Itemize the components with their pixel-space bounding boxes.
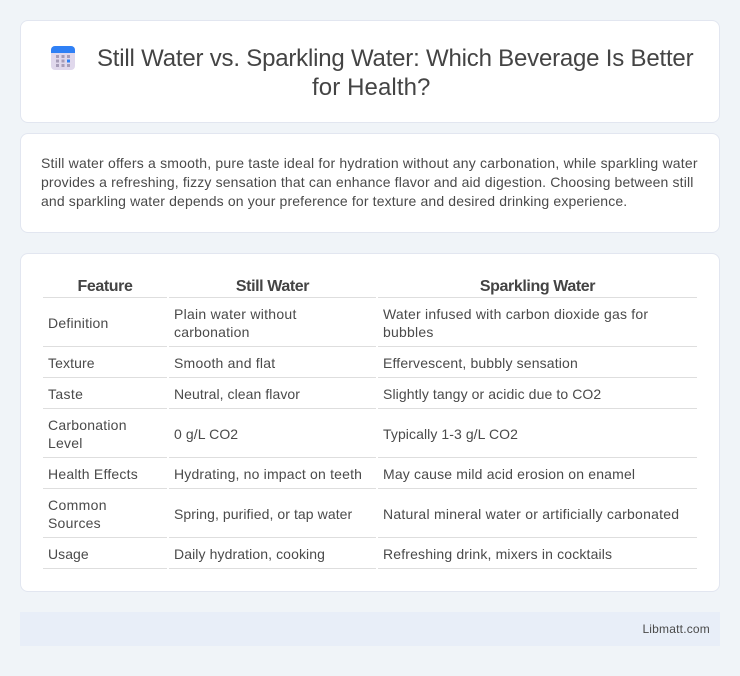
row: Carbonation Level: Level — [48, 435, 83, 451]
row: Usage: Usage — [48, 546, 89, 562]
row: Texture: Texture — [48, 355, 95, 371]
row: Common Sources — [48, 497, 679, 531]
row: Carbonation Level: Carbonation — [48, 417, 127, 433]
row: Usage: Refreshing drink, mixers in cocktails — [383, 546, 612, 562]
row: Common Sources: Common — [48, 497, 107, 513]
row: Definition: carbonation — [174, 324, 250, 340]
title: Still Water vs. Sparkling Water: Which Beverage Is Better — [97, 45, 693, 72]
row: Health Effects — [48, 466, 635, 482]
row: Definition: Definition — [48, 315, 109, 331]
footer — [20, 612, 720, 646]
text block: introduction — [41, 155, 698, 209]
row: Carbonation Level — [48, 417, 518, 451]
row: Definition — [48, 306, 648, 340]
row: Taste: Neutral, clean flavor — [174, 386, 300, 402]
text block: introduction: Still water offers a smooth, pure taste ideal for hydration without any carbonation, while sparkling water — [41, 155, 698, 171]
text block: introduction: and sparkling water depends on your preference for texture and desired drinking experience. — [41, 193, 627, 209]
panel: comparison table — [20, 253, 720, 592]
row: Health Effects: Hydrating, no impact on teeth — [174, 466, 362, 482]
title — [97, 45, 694, 101]
row: Texture: Smooth and flat — [174, 355, 275, 371]
row: Definition: Water infused with carbon dioxide gas for — [383, 306, 648, 322]
row: Common Sources: Sources — [48, 515, 101, 531]
row: Usage — [48, 546, 612, 562]
panel: introduction — [20, 133, 720, 233]
text block: introduction: provides a refreshing, fizzy sensation that can enhance flavor and aid digestion. Choosing between still — [41, 174, 693, 190]
row: Definition: Plain water without — [174, 306, 297, 322]
row: Health Effects: Health Effects — [48, 466, 138, 482]
row: Carbonation Level: 0 g/L CO2 — [174, 426, 238, 442]
footer: Libmatt.com — [642, 622, 710, 636]
row: Taste — [48, 386, 601, 402]
table header: Feature: Feature — [78, 278, 132, 295]
row: Carbonation Level: Typically 1-3 g/L CO2 — [383, 426, 518, 442]
row: Taste: Slightly tangy or acidic due to CO2 — [383, 386, 601, 402]
icon: calendar — [51, 46, 75, 70]
table header: Still Water: Still Water — [236, 278, 309, 295]
panel: header — [20, 20, 720, 123]
row: Texture: Effervescent, bubbly sensation — [383, 355, 578, 371]
row: Common Sources: Natural mineral water or artificially carbonated — [383, 506, 679, 522]
row: Common Sources: Spring, purified, or tap water — [174, 506, 352, 522]
table header: Sparkling Water: Sparkling Water — [480, 278, 595, 295]
row: Taste: Taste — [48, 386, 83, 402]
row: Health Effects: May cause mild acid erosion on enamel — [383, 466, 635, 482]
row: Definition: bubbles — [383, 324, 434, 340]
row: Usage: Daily hydration, cooking — [174, 546, 325, 562]
title: for Health? — [312, 74, 430, 101]
row: Texture — [48, 355, 578, 371]
